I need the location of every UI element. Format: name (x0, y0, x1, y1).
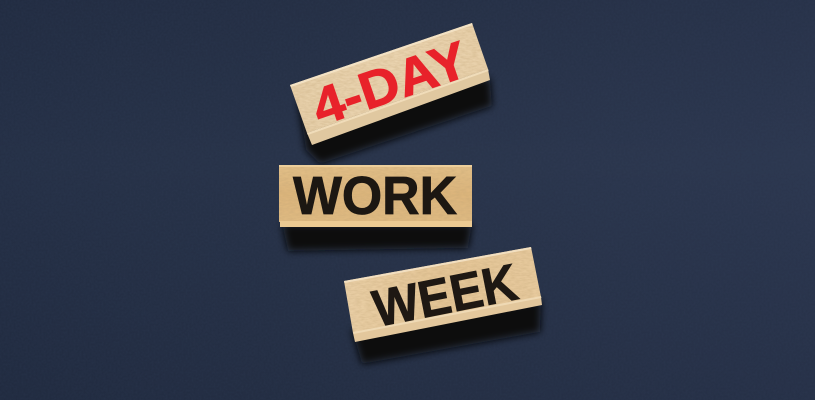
text: WEEK: WEEK (368, 253, 523, 339)
block 1 front edge (307, 69, 490, 145)
block: 4-DAY (290, 23, 490, 145)
block 1 top face (290, 23, 488, 133)
text: 4-DAY: 4-DAY (305, 31, 475, 137)
block 2 front edge (280, 221, 472, 227)
block: WORK (279, 165, 472, 227)
text: WORK: WORK (293, 166, 457, 226)
block 3 front edge (353, 297, 542, 342)
block shadows (282, 78, 541, 364)
block 2 top face (279, 165, 472, 222)
block 3 top face (344, 247, 541, 333)
block: WEEK (344, 247, 542, 342)
